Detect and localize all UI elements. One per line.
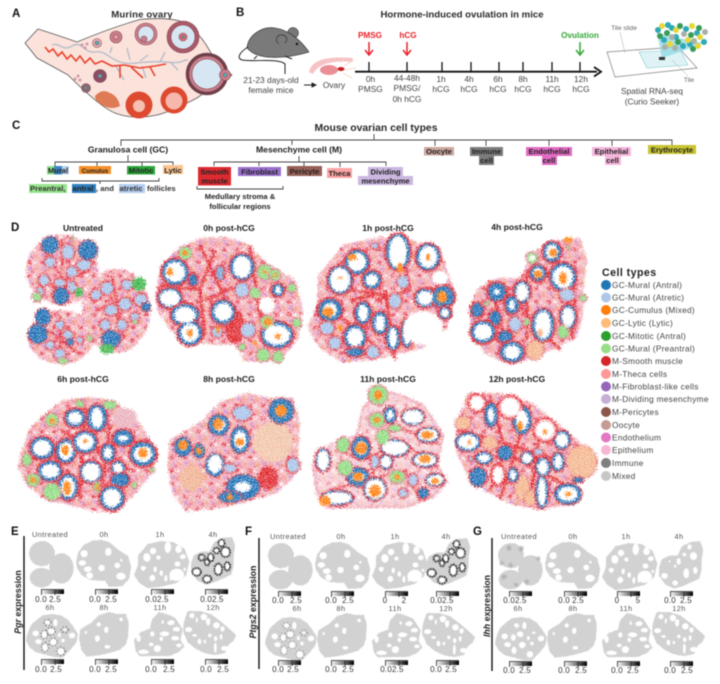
tile: Untreated: 0.0: [35, 595, 47, 604]
tile: 1h: 1h: [621, 532, 631, 541]
axis label: Ptgs2 expression: Ptgs2 expression: [248, 566, 258, 638]
tile: 0h: [546, 532, 599, 605]
GC subtypes: Cumulus: [82, 168, 109, 175]
tile: 8h: [548, 604, 596, 675]
panel D: spatial cell-type maps: [18, 222, 597, 512]
tile: 11h: [603, 604, 651, 675]
tile: 0h: 2.5: [105, 595, 117, 604]
icon: spatial slide: [607, 22, 708, 77]
tile: 8h: 8h: [336, 604, 346, 613]
timeline labels: 44-48h: [394, 73, 420, 83]
legend: Cell types: M-Smooth muscle: [612, 356, 683, 366]
other cell types: Immune: [472, 147, 501, 156]
heading: Hormone-induced ovulation: Hormone-induced ovulation in mice: [380, 10, 544, 20]
timeline labels: hCG: [572, 84, 590, 94]
tile: 0h: 0h: [336, 532, 346, 541]
map: 8h post-hCG: [167, 374, 300, 512]
icon: grey mouse: [239, 28, 309, 74]
GC subtypes: [47, 165, 183, 175]
ovary outline: [25, 19, 232, 117]
map: 1h post-hCG: 1h post-hCG: [362, 223, 414, 233]
panel letter A: A: [12, 8, 20, 20]
tile: 0h: 0.0: [558, 596, 570, 605]
other cell types: cell: [480, 156, 493, 165]
legend: Cell types: GC-Mural (Antral): [612, 280, 682, 290]
GC subtypes: Mural: [48, 166, 68, 175]
panel letter E: E: [11, 526, 19, 538]
tile: 12h: [653, 604, 704, 675]
legend: Cell types: Epithelium: [612, 445, 654, 455]
tile: Untreated: Untreated: [501, 532, 537, 541]
timeline labels: [358, 73, 590, 104]
tile: 12h: 2.5: [445, 665, 457, 674]
tile: 6h: 0.0: [272, 665, 284, 674]
tile: Untreated: 2.5: [49, 595, 61, 604]
tile: 6h: [496, 604, 546, 675]
map: 0h post-hCG: [155, 223, 303, 363]
tile: 11h: 11h: [389, 604, 401, 613]
tile: 6h: 2.5: [519, 666, 531, 675]
tile: 1h: 0: [383, 596, 388, 605]
follicle labels: follicles: [147, 184, 176, 193]
tile: 0h: [77, 530, 130, 604]
tile: 1h: 5: [636, 596, 641, 605]
mesenchyme subtypes: Dividing: [371, 168, 401, 176]
mesenchyme subtypes: [198, 166, 413, 186]
legend: Cell types: GC-Mitotic (Antral): [612, 331, 686, 341]
tile: 6h: 0.0: [35, 665, 47, 674]
tile: 4h: [660, 532, 702, 605]
tile: 4h: 2.5: [680, 596, 692, 605]
tile: 12h: 12h: [439, 604, 453, 613]
mesenchyme subtypes: Theca: [329, 169, 351, 178]
follicle labels: Preantral,: [30, 184, 65, 193]
tile: Untreated: 2.5: [290, 596, 302, 605]
tile: 11h: 2.5: [627, 666, 639, 675]
caption: Spatial RNA-seq: Spatial RNA-seq: [621, 86, 683, 96]
marker: PMSG: PMSG: [358, 31, 382, 40]
tile: 11h: 11h: [154, 603, 166, 612]
map: 1h post-hCG: [307, 223, 455, 363]
marker: hCG: [399, 31, 417, 55]
map: 4h post-hCG: [470, 222, 587, 365]
GC subtypes: Lytic: [164, 166, 182, 175]
tile: 11h: 0.02.5: [380, 665, 404, 674]
tile: 11h: 11h: [620, 604, 632, 613]
mesenchyme subtypes: Pericyte: [290, 167, 319, 176]
legend: Cell types: [601, 267, 709, 481]
other cell types: Erythrocyte: [651, 146, 693, 154]
timeline labels: hCG: [432, 84, 450, 94]
timeline labels: 0h hCG: [393, 94, 421, 104]
mesenchyme subtypes: mesenchyme: [361, 176, 410, 186]
panel E: Pgr expression: [13, 530, 235, 674]
marker: Ovulation: [561, 31, 599, 55]
tile: 11h: 0.0: [611, 666, 623, 675]
legend: Cell types: M-Theca cells: [612, 369, 667, 379]
mesenchyme subtypes: muscle: [201, 176, 228, 186]
arrow to ovary: [304, 83, 316, 87]
mesenchyme subtypes: Smooth: [200, 168, 229, 176]
timeline labels: PMSG: [358, 84, 383, 94]
caption: mice age: female mice: [248, 85, 294, 95]
legend: Cell types: Cell types: [602, 267, 657, 279]
panel A: murine ovary diagram: [25, 10, 232, 118]
tile: 6h: 6h: [513, 604, 523, 613]
marker: PMSG: [358, 31, 382, 55]
follicle labels: , and: [96, 184, 114, 193]
tile: 12h: 0.0: [430, 665, 442, 674]
map: 11h post-hCG: [313, 374, 447, 508]
marker: hCG: hCG: [399, 31, 417, 40]
panel letter C: C: [12, 120, 20, 132]
tile: 8h: 8h: [568, 604, 578, 613]
legend: Cell types: Endothelium: [612, 432, 661, 442]
tile: 4h: [192, 530, 234, 604]
tile: 1h: 1h: [390, 532, 400, 541]
legend: Cell types: Immune: [612, 458, 644, 468]
map: 0h post-hCG: 0h post-hCG: [203, 223, 255, 233]
map: 6h post-hCG: 6h post-hCG: [57, 374, 109, 384]
small atretic cells: [74, 42, 88, 82]
legend: Cell types: GC-Mural (Atretic): [612, 292, 684, 302]
tile: 12h: 2.5: [217, 665, 229, 674]
map: Untreated: Untreated: [63, 223, 103, 233]
panel letter G: G: [473, 526, 482, 538]
legend: Cell types: Mixed: [612, 471, 636, 481]
panel G: Ihh expression: [482, 532, 704, 675]
legend: Cell types: GC-Cumulus (Mixed): [612, 305, 695, 315]
tile: 8h: [318, 604, 366, 674]
icon: small ovary: [309, 58, 356, 78]
timeline labels: hCG: [514, 84, 532, 94]
tile: 0h: [316, 532, 369, 605]
tile: 6h: 2.5: [50, 665, 62, 674]
tile: 8h: 0.0: [89, 665, 101, 674]
tile: 12h: [184, 603, 235, 674]
timeline labels: PMSG/: [394, 83, 421, 93]
tile: 4h: 4h: [441, 532, 451, 541]
tile: 6h: 2.5: [287, 665, 299, 674]
timeline labels: hCG: [460, 84, 478, 94]
other cell types: cell: [543, 156, 555, 165]
legend: Cell types: Oocyte: [612, 420, 640, 430]
tile: 0h: 0.0: [325, 596, 337, 605]
caption: Spatial RNA-seq: (Curio Seeker): [625, 96, 679, 106]
map: Untreated: [26, 223, 151, 364]
label: Tile: Tile: [684, 77, 695, 84]
caption: Spatial RNA-seq: [621, 86, 683, 106]
tile: Untreated: Untreated: [32, 530, 68, 539]
follicle labels: [29, 184, 176, 193]
tile: 0h: 2.5: [342, 596, 354, 605]
tile: Untreated: 0.0: [272, 596, 284, 605]
tile: 8h: 2.5: [342, 665, 354, 674]
medullary label: follicular regions: [209, 202, 271, 211]
legend: Cell types: M-Fibroblast-like cells: [612, 382, 699, 392]
tile: 11h: [135, 603, 183, 674]
timeline labels: hCG: [543, 84, 561, 94]
tile: 1h: 2: [402, 596, 407, 605]
tile: 8h: 8h: [99, 603, 109, 612]
tile: 1h: [603, 532, 656, 605]
legend: Cell types: M-Dividing mesenchyme: [612, 394, 709, 404]
tile: 1h: 0.02.5: [145, 595, 169, 604]
legend: Cell types: GC-Lytic (Lytic): [612, 318, 673, 328]
panel C: cell type tree: [29, 123, 696, 211]
tile: 6h: [27, 603, 77, 674]
tile: 12h: 2.5: [681, 666, 693, 675]
corpora lutea: [95, 86, 188, 118]
other cell types: Endothelial: [529, 147, 569, 156]
caption: mice age: [243, 75, 299, 95]
other cell types: Oocyte: [426, 147, 452, 156]
tile: 4h: 0.02.5: [200, 595, 224, 604]
timeline labels: 0h: [366, 74, 375, 84]
tile: 12h: 0.0: [664, 666, 676, 675]
timeline labels: 4h: [464, 74, 474, 84]
tile: 4h: 0.02.5: [430, 596, 454, 605]
caption: mice age: 21-23 days-old: [243, 75, 299, 85]
tile: 6h: 6h: [292, 604, 302, 613]
tile: 0h: 0.0: [89, 595, 101, 604]
tile: 1h: 0: [615, 596, 620, 605]
map: 4h post-hCG: 4h post-hCG: [491, 222, 543, 232]
follicles: [82, 21, 230, 95]
tile: 0h: 2.5: [572, 596, 584, 605]
tile: 12h: [423, 604, 474, 674]
tile: 11h: 2.5: [163, 665, 175, 674]
tile: Untreated: [29, 530, 74, 604]
panel F: Ptgs2 expression: [248, 532, 474, 674]
tile: 8h: 0.0: [325, 665, 337, 674]
map: 12h post-hCG: 12h post-hCG: [489, 374, 545, 384]
follicle labels: atretic: [120, 184, 143, 193]
map: 8h post-hCG: 8h post-hCG: [203, 374, 255, 384]
marker: Ovulation: Ovulation: [561, 31, 599, 40]
timeline labels: 12h: [574, 74, 588, 84]
tile: 8h: 2.5: [575, 666, 587, 675]
timeline labels: 11h: [545, 74, 559, 84]
tile: 0h: 0h: [99, 530, 109, 539]
tile: 6h: 6h: [45, 603, 55, 612]
tile: 1h: 1h: [155, 530, 165, 539]
tile: 4h: 0.0: [664, 596, 676, 605]
other cell types: cell: [606, 156, 619, 165]
tile: 4h: [427, 532, 469, 605]
tile: 12h: 12h: [672, 604, 686, 613]
heading: Murine ovary: Murine ovary: [111, 10, 173, 20]
tile: 6h: [266, 604, 316, 674]
tile: 6h: 0.0: [503, 666, 515, 675]
tile: 11h: [373, 604, 421, 674]
timeline labels: 1h: [436, 74, 446, 84]
label: Ovary: Ovary: [323, 80, 346, 90]
legend: Cell types: M-Pericytes: [612, 407, 659, 417]
medullary label: Medullary stroma &: [205, 192, 276, 201]
label: Tile slide: Tile slide: [611, 25, 637, 32]
tile: Untreated: Untreated: [270, 532, 306, 541]
timeline labels: 6h: [493, 74, 503, 84]
tile: Untreated: [268, 532, 313, 605]
tile: 11h: 0.0: [145, 665, 157, 674]
mesenchyme subtypes: Fibroblast: [241, 168, 278, 176]
GC subtypes: Mitotic: [129, 166, 153, 175]
map: 11h post-hCG: 11h post-hCG: [360, 374, 416, 384]
timeline axis: [355, 62, 601, 76]
tile: 8h: 2.5: [105, 665, 117, 674]
map: 12h post-hCG: [455, 374, 597, 510]
panel letter B: B: [236, 7, 244, 19]
tile: 4h: 4h: [674, 532, 684, 541]
tile: 12h: 0.0: [200, 665, 212, 674]
other cell types: Epithelial: [595, 147, 628, 156]
vessels: grey blue: [52, 44, 188, 80]
axis label: Ihh expression: Ihh expression: [482, 575, 492, 637]
timeline labels: 8h: [518, 74, 528, 84]
panel B: ovulation timeline: [239, 10, 708, 106]
medullary label: [205, 192, 276, 211]
tile: Untreated: [498, 532, 543, 605]
tile: Untreated: 0.02.5: [503, 596, 527, 605]
heading: Mouse ovarian cell types: Mouse ovarian cell types: [314, 123, 438, 134]
other cell types: [424, 145, 696, 165]
axis label: Pgr expression: Pgr expression: [13, 570, 23, 634]
map: 6h post-hCG: [18, 374, 157, 512]
panel letter D: D: [11, 222, 19, 234]
timeline labels: hCG: [489, 84, 507, 94]
tile: 1h: [373, 532, 426, 605]
vessels: red wiggle: [45, 47, 166, 78]
label: Granulosa cell: Granulosa cell (GC): [88, 144, 168, 154]
tile: 0h: 0h: [568, 532, 578, 541]
tile: 4h: 4h: [208, 530, 218, 539]
tile: 1h: [135, 530, 188, 604]
label: Mesenchyme cell: Mesenchyme cell (M): [256, 144, 342, 154]
panel letter F: F: [245, 526, 252, 538]
follicle labels: antral: [72, 184, 93, 193]
legend: Cell types: GC-Mural (Preantral): [612, 344, 695, 354]
tile: 8h: [80, 603, 128, 674]
tile: 12h: 12h: [206, 603, 220, 612]
tile: 8h: 0.0: [558, 666, 570, 675]
